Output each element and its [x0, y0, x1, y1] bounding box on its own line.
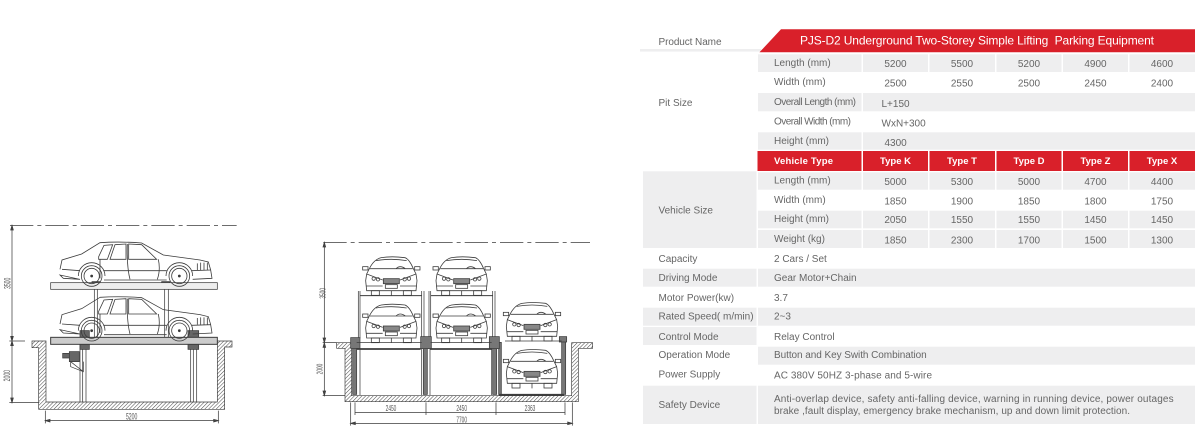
vehicle width row: [774, 195, 1174, 208]
dimension labels: 3500: [319, 288, 328, 299]
vehicle height row: 1450: [1151, 215, 1174, 226]
pit length row: Length (mm): [774, 58, 831, 69]
vehicle length row: Length (mm): [774, 176, 831, 186]
pit structure: [32, 341, 232, 409]
pit length row: 5200: [884, 59, 907, 70]
driving mode row: Driving Mode: [658, 273, 718, 284]
driving mode row: [643, 269, 1195, 287]
rated speed row: Rated Speed( m/min): [658, 312, 754, 322]
pit width row: 2500: [884, 78, 907, 90]
vehicle type header row: Type K: [880, 156, 911, 167]
product name row: [640, 29, 1195, 52]
dimension labels: 5200: [126, 411, 137, 422]
driving mode row: Gear Motor+Chain: [774, 273, 857, 284]
pit width row: 2450: [1084, 78, 1107, 90]
pit height row: Height (mm): [774, 136, 829, 147]
car: right pit: [503, 349, 561, 388]
vehicle type header row: Type Z: [1081, 156, 1111, 167]
pit length row: [758, 54, 1195, 72]
vehicle type header row: Type X: [1147, 156, 1178, 167]
safety device row: brake ,fault display, emergency brake mechanism, up and down limit protection.: [774, 406, 1130, 417]
platforms: [357, 296, 564, 395]
overall length row: L+150: [882, 99, 910, 110]
product name row: PJS-D2 Underground Two-Storey Simple Lifting Parking Equipment: [800, 34, 1155, 48]
vehicle length row: 5000: [884, 177, 907, 188]
dimension labels: 2450: [456, 405, 467, 413]
vehicle height row: 2050: [884, 215, 907, 226]
vehicle length row: 4700: [1084, 177, 1107, 188]
power supply row: [658, 370, 932, 382]
operation mode row: Button and Key Swith Combination: [774, 350, 927, 361]
safety device row: Safety Device: [658, 400, 721, 411]
vehicle width row: 1750: [1151, 196, 1174, 208]
vehicle width row: Width (mm): [774, 195, 826, 206]
car: lower middle: [433, 304, 490, 343]
vehicle size group: Vehicle Size: [658, 206, 713, 216]
lift posts: [80, 282, 199, 402]
vehicle width row: 1900: [951, 196, 974, 208]
car lower: [60, 297, 212, 341]
capacity row: Capacity: [658, 254, 697, 265]
diagram: side elevation of two-storey lift: [1, 225, 237, 423]
vehicle type header row: [758, 151, 1195, 171]
overall length row: Overall Length (mm): [774, 97, 856, 108]
vehicle weight row: 1700: [1018, 236, 1041, 246]
pit width row: [774, 77, 1174, 90]
motor power row: Motor Power(kw): [658, 293, 734, 304]
car: top middle: [433, 257, 490, 296]
vehicle size group: [643, 171, 1195, 248]
vehicle height row: [758, 211, 1195, 228]
dimension labels: [1, 278, 137, 422]
vehicle weight row: 2300: [951, 236, 974, 246]
overall width row: [774, 116, 926, 129]
car: lower left: [363, 304, 420, 343]
pit structure: [337, 343, 593, 402]
vehicle width row: 1800: [1084, 196, 1107, 208]
dimension labels: [317, 288, 536, 425]
rated speed row: 2~3: [774, 312, 791, 322]
car: right upper: [503, 302, 561, 341]
vehicle height row: 1550: [951, 215, 974, 226]
diagram: front elevation of three-bay layout: [317, 242, 593, 426]
vehicle weight row: [758, 230, 1195, 248]
vehicle weight row: Weight (kg): [774, 234, 825, 245]
vehicle height row: Height (mm): [774, 214, 829, 225]
platforms: [51, 283, 217, 344]
vehicle length row: 5000: [1018, 177, 1041, 188]
vehicle width row: 1850: [1018, 196, 1041, 208]
control mode row: Control Mode: [658, 332, 719, 343]
spec table: [640, 29, 1195, 424]
pit length row: 4900: [1084, 59, 1107, 70]
vehicle width row: 1850: [884, 196, 907, 208]
pit length row: 5200: [1018, 59, 1041, 70]
pit length row: 5500: [951, 59, 974, 70]
pit height row: [758, 132, 1195, 150]
safety device row: [643, 386, 1195, 424]
pit width row: 2550: [951, 78, 974, 90]
power supply row: Power Supply: [658, 370, 720, 380]
dimension labels: 2450: [386, 405, 397, 413]
vehicle type header row: Type T: [947, 156, 977, 167]
vehicle length row: [758, 172, 1195, 190]
pit height row: 4300: [884, 138, 907, 149]
dimension labels: 2000: [317, 363, 325, 374]
vehicle length row: 4400: [1151, 177, 1174, 188]
car: top left: [363, 257, 420, 296]
dimension labels: 3500: [2, 278, 13, 289]
overall width row: Overall Width (mm): [774, 116, 851, 128]
motor power row: [658, 293, 788, 304]
lift frames: [351, 291, 567, 395]
safety device row: Anti-overlap device, safety anti-falling device, warning in running device, power outages: [774, 394, 1174, 405]
dimension labels: 2363: [525, 405, 536, 413]
dimension lines: [9, 225, 237, 423]
capacity row: 2 Cars / Set: [774, 254, 827, 265]
vehicle type header row: Type D: [1014, 156, 1045, 167]
pit width row: 2500: [1018, 78, 1041, 90]
power supply row: AC 380V 50HZ 3-phase and 5-wire: [774, 370, 932, 382]
control mode row: [643, 327, 835, 345]
overall width row: WxN+300: [882, 118, 926, 129]
dimension labels: 2000: [1, 370, 12, 381]
dimension labels: 7700: [456, 416, 467, 425]
vehicle weight row: 1300: [1151, 236, 1174, 246]
operation mode row: [658, 347, 1195, 365]
vehicle height row: 1450: [1084, 215, 1107, 226]
rated speed row: [643, 308, 1195, 326]
vehicle weight row: 1850: [884, 236, 907, 246]
overall length row: [758, 93, 1195, 111]
pit width row: 2400: [1151, 78, 1174, 90]
pit length row: 4600: [1151, 59, 1174, 70]
operation mode row: Operation Mode: [658, 350, 731, 361]
vehicle weight row: 1500: [1084, 236, 1107, 246]
car upper: [60, 242, 212, 286]
vehicle height row: 1550: [1018, 215, 1041, 226]
pit width row: Width (mm): [774, 77, 826, 88]
pit size group: [658, 54, 1195, 150]
pit size group: Pit Size: [658, 98, 693, 109]
control mode row: Relay Control: [774, 332, 835, 343]
dimension lines: [323, 242, 590, 426]
capacity row: [658, 254, 827, 265]
product name row: Product Name: [658, 37, 722, 48]
vehicle length row: 5300: [951, 177, 974, 188]
vehicle type header row: Vehicle Type: [774, 156, 833, 167]
drive motor: [63, 352, 83, 372]
motor power row: 3.7: [774, 293, 788, 304]
